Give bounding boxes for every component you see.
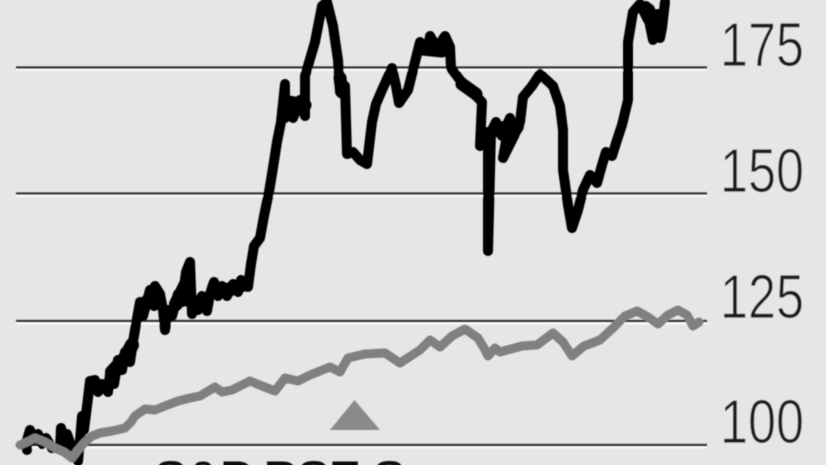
axis labels: 125 (720, 263, 804, 332)
triangle marker (330, 400, 380, 430)
axis labels: 175 (720, 11, 804, 80)
gridlines (16, 68, 707, 448)
axis labels: 100 (720, 388, 804, 457)
axis labels: 150 (720, 137, 804, 206)
index line (grey) (20, 310, 699, 458)
stock price line (black) (27, 2, 665, 461)
axis labels (720, 11, 804, 457)
